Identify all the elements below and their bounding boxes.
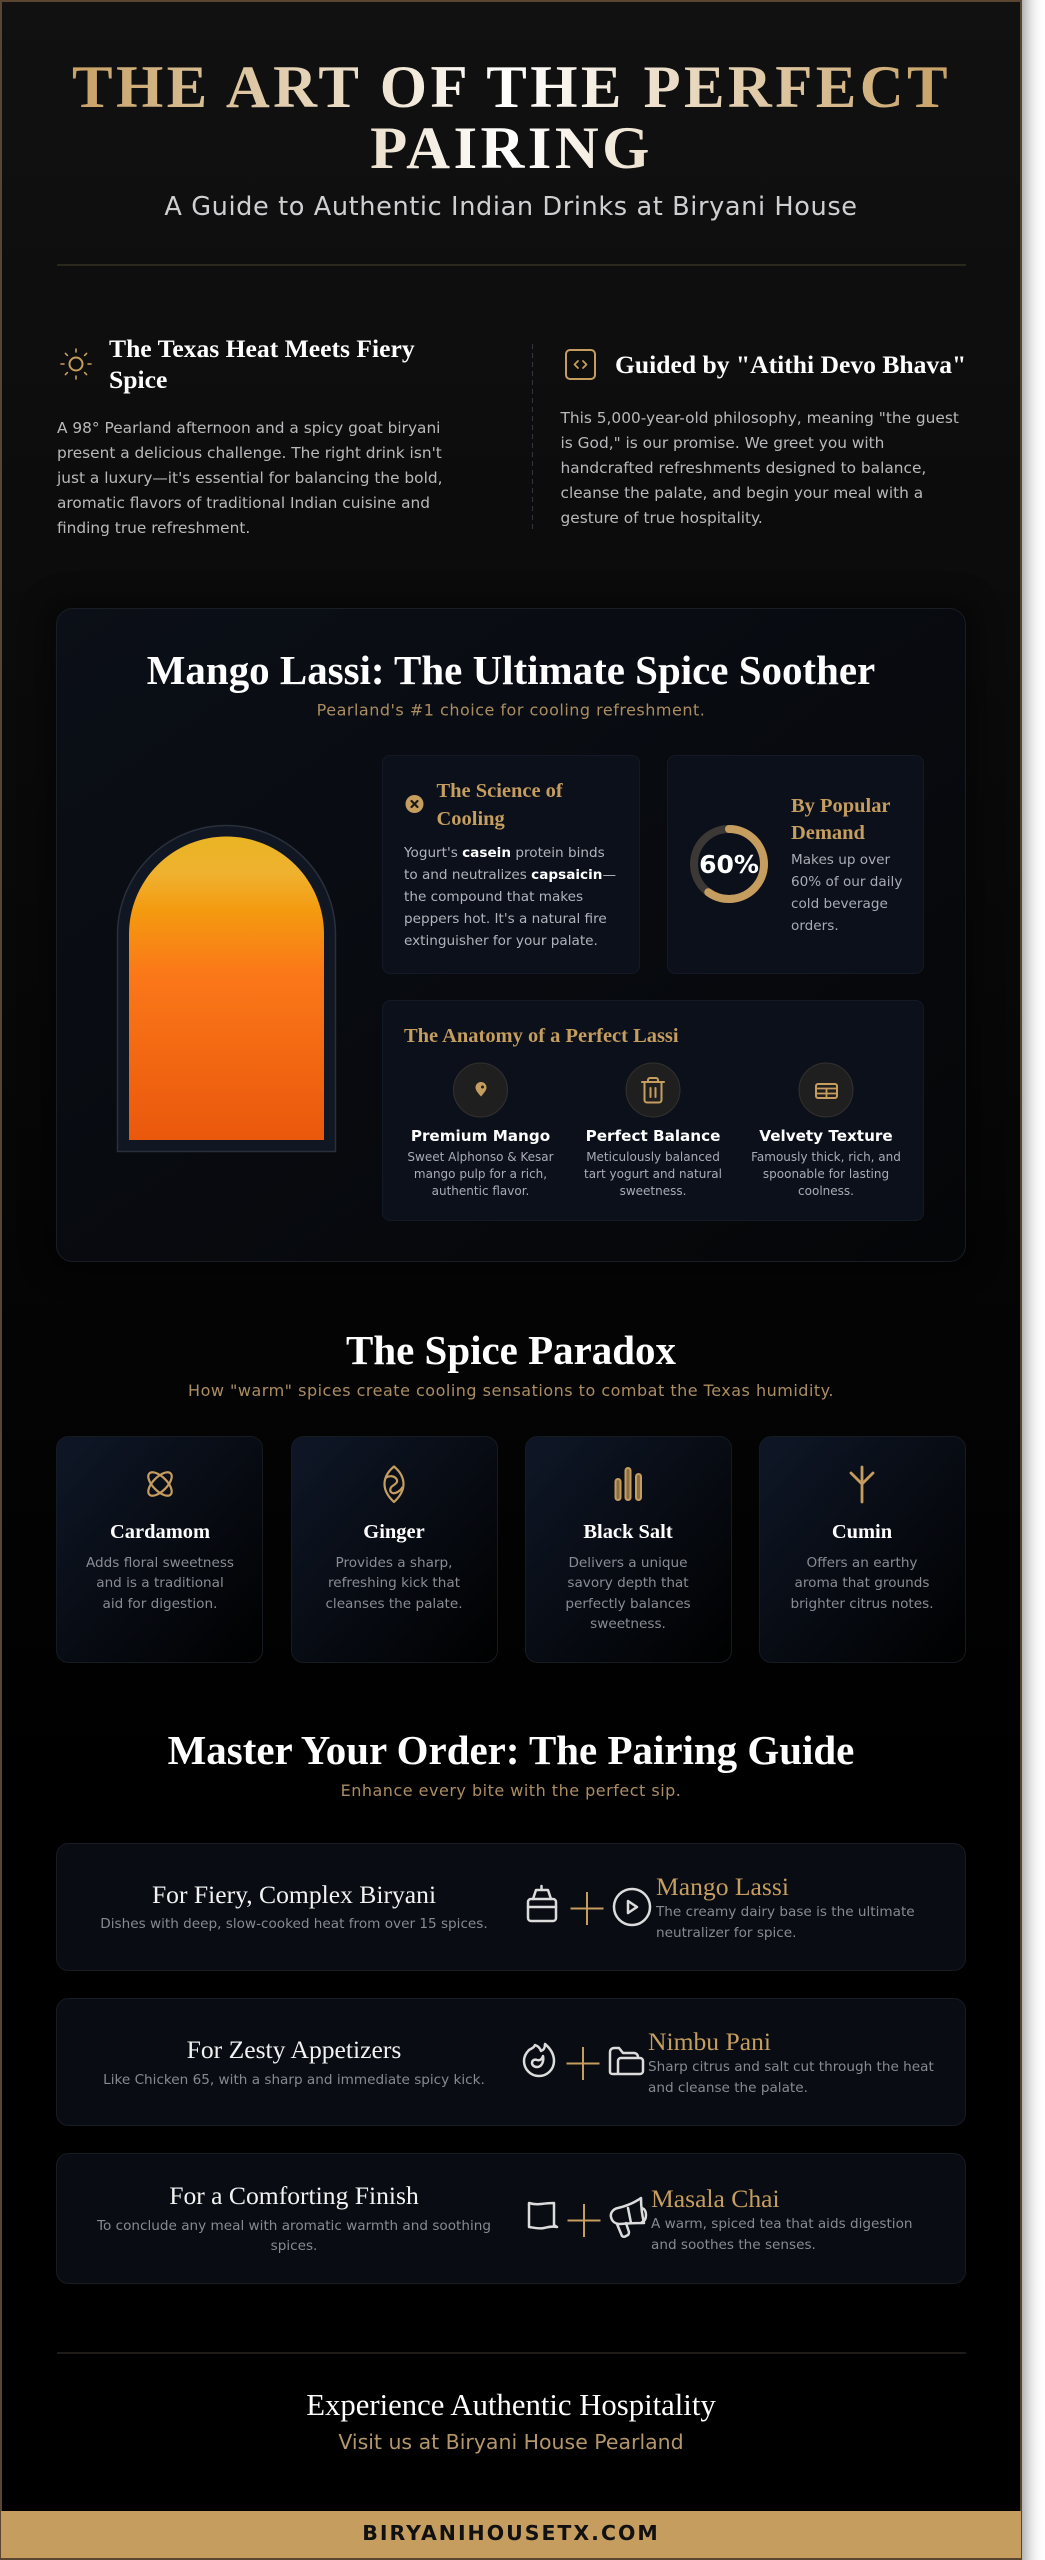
heading: Demand	[791, 822, 866, 844]
card: anatomy of a lassi	[382, 1000, 924, 1220]
icon: x circle	[406, 795, 424, 813]
text block: handcrafted refreshments designed to balance,	[560, 459, 926, 477]
card: cardamom	[56, 1436, 262, 1662]
item: velvety texture: spoonable for lasting	[763, 1167, 889, 1181]
icon: code square	[566, 350, 595, 379]
heading: Guided by "Atithi Devo Bhava"	[615, 350, 966, 379]
card: ginger: refreshing kick that	[328, 1575, 460, 1591]
card: ginger	[292, 1436, 498, 1662]
row: comforting finish pairing: To conclude any meal with aromatic warmth and soothing	[96, 2218, 491, 2234]
item: perfect balance: Perfect Balance	[586, 1127, 720, 1145]
icon: ginger	[384, 1466, 404, 1502]
card: cumin: Cumin	[832, 1521, 893, 1543]
row: fiery biryani pairing: neutralizer for spice.	[656, 1925, 796, 1941]
icon: plus	[568, 2204, 600, 2237]
row: comforting finish pairing: For a Comforting Finish	[169, 2181, 419, 2210]
heading: The Anatomy of a Perfect Lassi	[404, 1025, 679, 1047]
row: fiery biryani pairing: For Fiery, Complex Biryani	[152, 1880, 436, 1909]
heading: By Popular	[791, 795, 891, 817]
text block: Makes up over	[791, 852, 891, 868]
card: black salt	[526, 1436, 732, 1662]
heading: The Texas Heat Meets Fiery	[109, 334, 415, 363]
card: science of cooling	[382, 756, 640, 974]
row: fiery biryani pairing	[56, 1844, 966, 1970]
item: velvety texture	[751, 1063, 901, 1198]
text block: just a luxury—it's essential for balancing the bold,	[56, 469, 442, 487]
item: perfect balance	[584, 1063, 722, 1198]
icon: map pin	[454, 1063, 508, 1117]
text block: gesture of true hospitality.	[560, 509, 763, 527]
card: black salt: Black Salt	[583, 1521, 673, 1543]
donut chart: 60%: 60%	[699, 850, 759, 879]
card: cardamom: Adds floral sweetness	[86, 1555, 234, 1571]
card: cumin: aroma that grounds	[795, 1575, 929, 1591]
heading: Cooling	[436, 808, 506, 830]
icon: scroll	[529, 2203, 557, 2228]
row: comforting finish pairing	[56, 2154, 966, 2284]
icon: play circle	[614, 1889, 650, 1925]
icon: plus	[566, 2047, 600, 2080]
panel: Mango Lassi	[46, 600, 976, 1272]
section heading: pairing guide: Master Your Order: The Pairing Guide	[168, 1727, 854, 1773]
row: zesty appetizers pairing: For Zesty Appetizers	[187, 2035, 401, 2064]
icon: flame	[524, 2044, 554, 2076]
donut chart: 60%	[694, 829, 764, 899]
subtitle: A Guide to Authentic Indian Drinks at Biryani House	[164, 192, 858, 222]
row: zesty appetizers pairing	[56, 1998, 966, 2126]
row: fiery biryani pairing: Dishes with deep, slow-cooked heat from over 15 spices.	[100, 1916, 488, 1932]
card: black salt: perfectly balances	[565, 1596, 691, 1612]
heading: Mango Lassi: The Ultimate Spice Soother	[147, 647, 875, 693]
section heading: spice paradox: The Spice Paradox	[346, 1327, 676, 1373]
row: comforting finish pairing: spices.	[271, 2238, 317, 2254]
card: cardamom: Cardamom	[110, 1521, 210, 1543]
section heading: pairing guide	[168, 1727, 854, 1800]
row: comforting finish pairing: Masala Chai	[651, 2184, 780, 2213]
text block: Yogurt's casein protein binds	[404, 845, 605, 861]
card: cumin: brighter citrus notes.	[790, 1596, 934, 1612]
item: perfect balance: tart yogurt and natural	[584, 1167, 722, 1181]
card: ginger: cleanses the palate.	[325, 1596, 463, 1612]
row: zesty appetizers pairing: and cleanse the palate.	[648, 2080, 808, 2096]
heading: The Science of	[436, 780, 564, 802]
item: premium mango	[407, 1063, 554, 1198]
icon: trash can	[626, 1063, 680, 1117]
text block: cold beverage	[791, 896, 888, 912]
row: zesty appetizers pairing: Like Chicken 65, with a sharp and immediate spicy kick.	[103, 2072, 485, 2088]
text block: orders.	[791, 918, 839, 934]
item: velvety texture: Velvety Texture	[759, 1127, 893, 1145]
text block: present a delicious challenge. The right drink isn't	[57, 444, 442, 462]
icon: table	[799, 1063, 853, 1117]
card: popular demand	[668, 756, 924, 974]
panel: Atithi Devo Bhava	[560, 350, 966, 527]
text block: 60% of our daily	[791, 874, 902, 890]
panel: Texas heat	[56, 334, 442, 537]
icon: megaphone	[611, 2198, 646, 2237]
icon: plus	[570, 1892, 604, 1925]
text block: finding true refreshment.	[57, 519, 250, 537]
text block: peppers hot. It's a natural fire	[404, 911, 607, 927]
icon: bag	[528, 1886, 556, 1921]
text block: extinguisher for your palate.	[404, 933, 598, 949]
heading: Spice	[109, 365, 167, 394]
text block: A 98° Pearland afternoon and a spicy goat biryani	[57, 419, 440, 437]
item: perfect balance: sweetness.	[620, 1184, 686, 1198]
closing call to action: Experience Authentic Hospitality	[306, 2388, 716, 2422]
card: black salt: Delivers a unique	[568, 1555, 688, 1571]
title	[72, 54, 951, 182]
item: premium mango: mango pulp for a rich,	[414, 1167, 547, 1181]
item: premium mango: Sweet Alphonso & Kesar	[407, 1150, 554, 1164]
closing call to action: Visit us at Biryani House Pearland	[338, 2430, 684, 2454]
row: fiery biryani pairing: Mango Lassi	[656, 1872, 789, 1901]
row: comforting finish pairing: and soothes the senses.	[651, 2237, 816, 2253]
item: perfect balance: Meticulously balanced	[586, 1150, 720, 1164]
icon: cumin	[851, 1467, 873, 1502]
icon: folders	[610, 2048, 643, 2074]
section heading: spice paradox	[188, 1327, 834, 1400]
icon: black salt	[616, 1468, 641, 1500]
text block: the compound that makes	[404, 889, 583, 905]
row: zesty appetizers pairing: Nimbu Pani	[648, 2027, 771, 2056]
item: velvety texture: Famously thick, rich, and	[751, 1150, 901, 1164]
card: cardamom: aid for digestion.	[103, 1596, 217, 1612]
item: velvety texture: coolness.	[798, 1184, 854, 1198]
card: cumin	[760, 1436, 966, 1662]
icon: sun	[61, 349, 91, 379]
footer band: BIRYANIHOUSETX.COM	[362, 2521, 660, 2545]
footer band	[1, 2511, 1021, 2558]
text block: is God," is our promise. We greet you with	[560, 434, 884, 452]
card: cardamom: and is a traditional	[96, 1575, 224, 1591]
header	[72, 54, 951, 222]
card: black salt: sweetness.	[590, 1616, 666, 1632]
row: zesty appetizers pairing: Sharp citrus and salt cut through the heat	[648, 2059, 934, 2075]
item: premium mango: authentic flavor.	[432, 1184, 529, 1198]
card: cumin: Offers an earthy	[807, 1555, 917, 1571]
title: PAIRING	[370, 115, 653, 182]
text block: This 5,000-year-old philosophy, meaning "the guest	[560, 409, 959, 427]
card: ginger: Provides a sharp,	[335, 1555, 453, 1571]
icon: cardamom	[144, 1468, 176, 1500]
illustration: mango lassi glass	[118, 826, 336, 1152]
title: THE ART OF THE PERFECT	[72, 54, 951, 121]
card: black salt: savory depth that	[567, 1575, 689, 1591]
closing call to action	[306, 2388, 716, 2454]
item: premium mango: Premium Mango	[411, 1127, 550, 1145]
text block: cleanse the palate, and begin your meal with a	[560, 484, 923, 502]
text block: to and neutralizes capsaicin—	[404, 867, 616, 883]
card: ginger: Ginger	[363, 1521, 425, 1543]
subtitle: Pearland's #1 choice for cooling refreshment.	[317, 700, 705, 720]
row: comforting finish pairing: A warm, spiced tea that aids digestion	[651, 2216, 913, 2232]
section heading: pairing guide: Enhance every bite with the perfect sip.	[341, 1781, 681, 1800]
section heading: spice paradox: How "warm" spices create cooling sensations to combat the Texas humidity.	[188, 1381, 834, 1400]
text block: aromatic flavors of traditional Indian cuisine and	[57, 494, 430, 512]
row: fiery biryani pairing: The creamy dairy base is the ultimate	[655, 1904, 915, 1920]
